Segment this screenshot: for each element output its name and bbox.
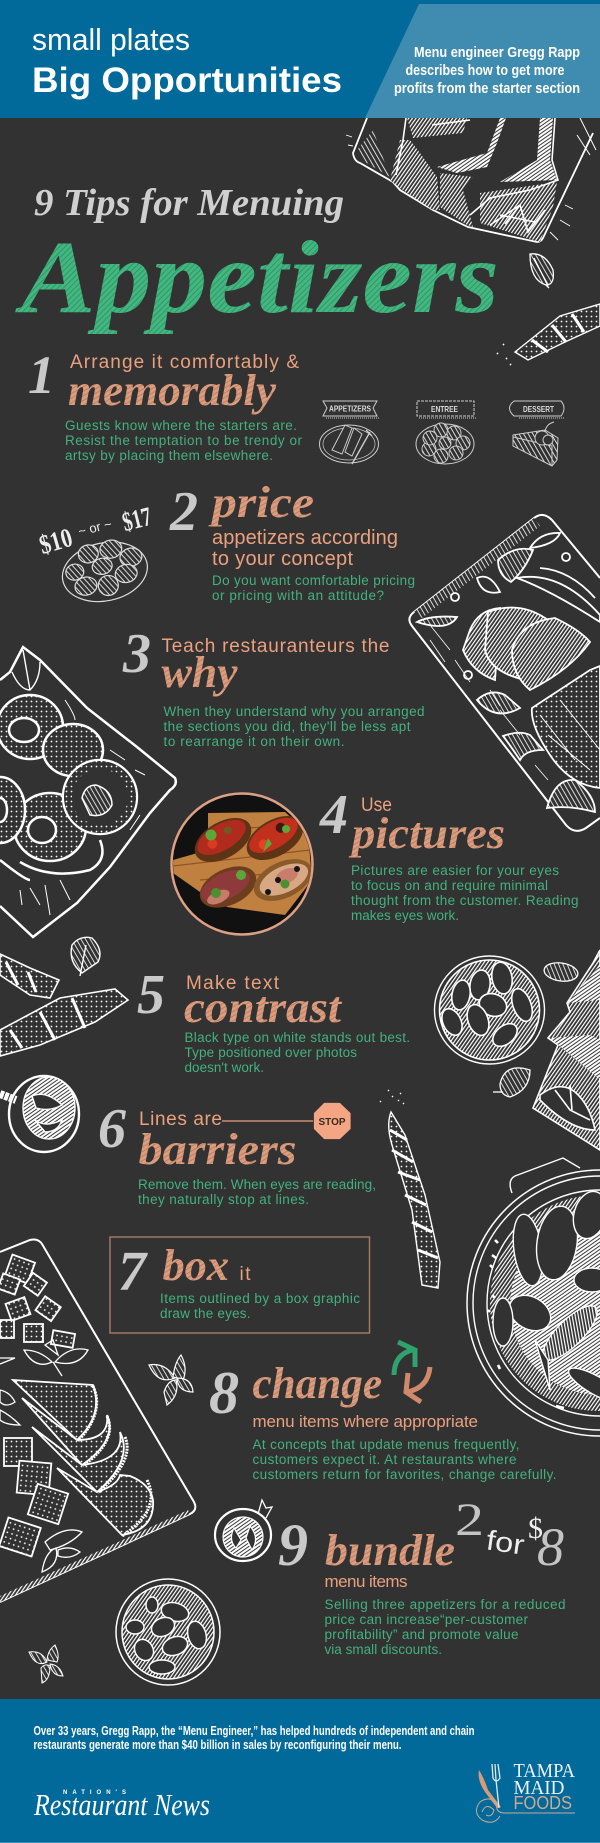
tip 2 body: or pricing with an attitude?: [212, 588, 384, 603]
header callout text: describes how to get more: [406, 62, 564, 79]
tip 9 body: [324, 1597, 566, 1657]
tip 9 script word: bundle: [325, 1526, 455, 1575]
tip 3 heading: Teach restauranteurs the: [162, 636, 390, 657]
icon: stop sign: STOP: [318, 1116, 346, 1128]
tip 7 panel: [110, 1237, 370, 1333]
illustration: small leaf: [493, 1068, 530, 1097]
photo: bruschetta on board: [172, 794, 319, 934]
illustration: wrapped food on board, top right: [346, 118, 596, 242]
tip 1 body: Resist the temptation to be trendy or: [65, 433, 302, 448]
menu diagram: entree: [416, 401, 476, 464]
logo: Nation's Restaurant News: NATION'S: [63, 1790, 131, 1796]
tip 3 script word: why: [162, 648, 238, 697]
tip 8: [209, 1342, 556, 1482]
illustration: bean bowl bottom: [116, 1579, 220, 1685]
tip 3 body: the sections you did, they'll be less apt: [164, 719, 411, 734]
tip 4 body: to focus on and require minimal: [351, 878, 548, 893]
tip 8 body: customers expect it. At restaurants where: [252, 1452, 516, 1467]
tip 8 script word: change: [252, 1359, 382, 1408]
tip 9 body: Selling three appetizers for a reduced: [324, 1597, 566, 1612]
footer text: [34, 1723, 475, 1752]
tip 2 heading: appetizers according: [212, 527, 398, 549]
tip 7 body: Items outlined by a box graphic: [160, 1291, 360, 1306]
tip 6 script word: barriers: [138, 1125, 296, 1174]
tip 4 body: makes eyes work.: [351, 908, 459, 923]
price: $17: $17: [119, 501, 154, 537]
tip 6 body: [138, 1177, 376, 1207]
logo: Tampa Maid Foods: FOODS: [514, 1793, 572, 1813]
header callout panel: [365, 4, 600, 118]
logo: Tampa Maid Foods: TAMPA: [514, 1760, 576, 1782]
illustration: meat board right: [409, 515, 600, 831]
tip 7 body: draw the eyes.: [160, 1306, 250, 1321]
tip 3 body: When they understand why you arranged: [164, 704, 424, 719]
icon: green arrow: [394, 1342, 415, 1375]
illustration: tomato left: [0, 1076, 79, 1152]
illustration: basil sprig: [149, 1355, 193, 1405]
tip 9: [278, 1494, 566, 1657]
tip 5 script word: contrast: [184, 983, 343, 1032]
header title big: Big Opportunities: [32, 61, 342, 100]
tip 7 script word: box: [162, 1241, 229, 1290]
illustration: leaf: [530, 254, 553, 288]
tip 8 body: At concepts that update menus frequently,: [252, 1437, 520, 1452]
tip 5 heading: Make text: [186, 973, 280, 994]
illustration: tomato bottom: [215, 1500, 272, 1561]
tip 4 heading: Use: [361, 795, 392, 816]
tip 7 heading: it: [240, 1264, 251, 1285]
tip 1 heading: Arrange it comfortably &: [70, 352, 299, 373]
illustration: leaf under board: [71, 937, 100, 976]
deal: 2 for $8: [455, 1494, 564, 1577]
title: 9 tips: 9 Tips for Menuing: [34, 182, 344, 224]
illustration: basil sprig bottom: [29, 1645, 63, 1683]
tip 4: [172, 784, 578, 934]
deal: 2 for $8: $: [528, 1512, 543, 1545]
tip 4 body: Pictures are easier for your eyes: [351, 863, 559, 878]
illustration: breadstick top right: [497, 304, 600, 365]
deal: 2 for $8: 2: [455, 1494, 484, 1546]
price: $10: $10: [36, 522, 76, 560]
tip 2 heading: [212, 527, 398, 570]
illustration: breadsticks left: [0, 954, 128, 1056]
tip 1 body: Guests know where the starters are.: [65, 418, 297, 433]
line to stop sign: [222, 1120, 314, 1122]
menu diagram: dessert: [510, 401, 564, 466]
menu diagram: entree: ENTREE: [431, 405, 459, 414]
tip 5 body: [184, 1030, 410, 1075]
tip 4 body: thought from the customer. Reading: [351, 893, 578, 908]
tip 1 body: artsy by placing them elsewhere.: [65, 448, 273, 463]
deal: 2 for $8: 8: [537, 1517, 564, 1577]
tip 3 body: [164, 704, 424, 749]
tip 5: [137, 964, 410, 1075]
header title small: small plates: [32, 22, 190, 57]
logo: Tampa Maid Foods: [476, 1760, 576, 1822]
price: or: ~ or ~: [77, 516, 114, 539]
tip 4 body: [351, 863, 578, 923]
plate of appetizers: [57, 534, 153, 609]
tip 6: [98, 1098, 376, 1207]
illustration: wedge on board, right: [533, 950, 600, 1150]
illustration: vertical breadstick: [380, 1090, 440, 1288]
tip 2 script word: price: [207, 478, 314, 527]
icon: salmon arrow: [406, 1367, 430, 1402]
logo: Tampa Maid Foods: MAID: [514, 1777, 564, 1799]
tip 1: [28, 345, 564, 466]
number 1: 1: [28, 345, 55, 405]
tip 5 body: doesn't work.: [184, 1060, 264, 1075]
illustration: pan of mussels right: [467, 1158, 600, 1436]
illustration: onion ring board left: [0, 647, 176, 937]
number 4: 4: [319, 784, 348, 846]
deal: 2 for $8: for: [484, 1525, 526, 1561]
number 3: 3: [122, 623, 151, 685]
tip 1 script word: memorably: [68, 366, 276, 415]
tip 5 body: Black type on white stands out best.: [184, 1030, 410, 1045]
tip 3: [122, 623, 424, 749]
number 7: 7: [118, 1241, 148, 1303]
menu diagram: appetizers: APPETIZERS: [329, 404, 372, 414]
menu diagram: dessert: DESSERT: [523, 405, 554, 414]
illustration: cheese board left: [0, 1240, 195, 1602]
header callout text: [394, 44, 580, 97]
tip 6 body: they naturally stop at lines.: [138, 1192, 309, 1207]
number 9: 9: [278, 1512, 308, 1578]
tip 8 body: customers return for favorites, change carefully.: [252, 1467, 556, 1482]
tip 9 body: profitability” and promote value: [324, 1627, 518, 1642]
footer band: [0, 1699, 600, 1843]
tip 1 body: [65, 418, 302, 463]
header band: [0, 0, 600, 118]
tip 9 heading: menu items: [324, 1572, 408, 1591]
illustration: almond: [543, 961, 579, 983]
number 2: 2: [169, 481, 198, 543]
tip 6 heading: Lines are: [139, 1109, 222, 1130]
tip 8 heading: menu items where appropriate: [252, 1412, 478, 1431]
tip 5 body: Type positioned over photos: [184, 1045, 357, 1060]
tip 4 script word: pictures: [348, 809, 505, 858]
logo: Nation's Restaurant News: Restaurant News: [33, 1787, 210, 1822]
tip 2 body: Do you want comfortable pricing: [212, 573, 415, 588]
number 5: 5: [137, 964, 165, 1026]
icon: stop sign: [314, 1102, 351, 1140]
tip 6 body: Remove them. When eyes are reading,: [138, 1177, 376, 1192]
tip 9 body: price can increase“per-customer: [324, 1612, 528, 1627]
tip 3 body: to rearrange it on their own.: [164, 734, 344, 749]
footer text: restaurants generate more than $40 billion in sales by reconfiguring their menu.: [34, 1737, 402, 1752]
number 8: 8: [209, 1360, 239, 1426]
tip 8 body: [252, 1437, 556, 1482]
menu diagram: appetizers: [320, 401, 379, 464]
tip 2: [36, 478, 415, 609]
tip 9 body: via small discounts.: [324, 1642, 442, 1657]
title: appetizers: Appetizers: [15, 220, 499, 335]
number 6: 6: [98, 1098, 126, 1160]
illustration: bean bowl right: [434, 956, 544, 1064]
tip 2 heading: to your concept: [212, 548, 353, 570]
tip 2 body: [212, 573, 415, 603]
tip 7 body: [160, 1291, 360, 1321]
